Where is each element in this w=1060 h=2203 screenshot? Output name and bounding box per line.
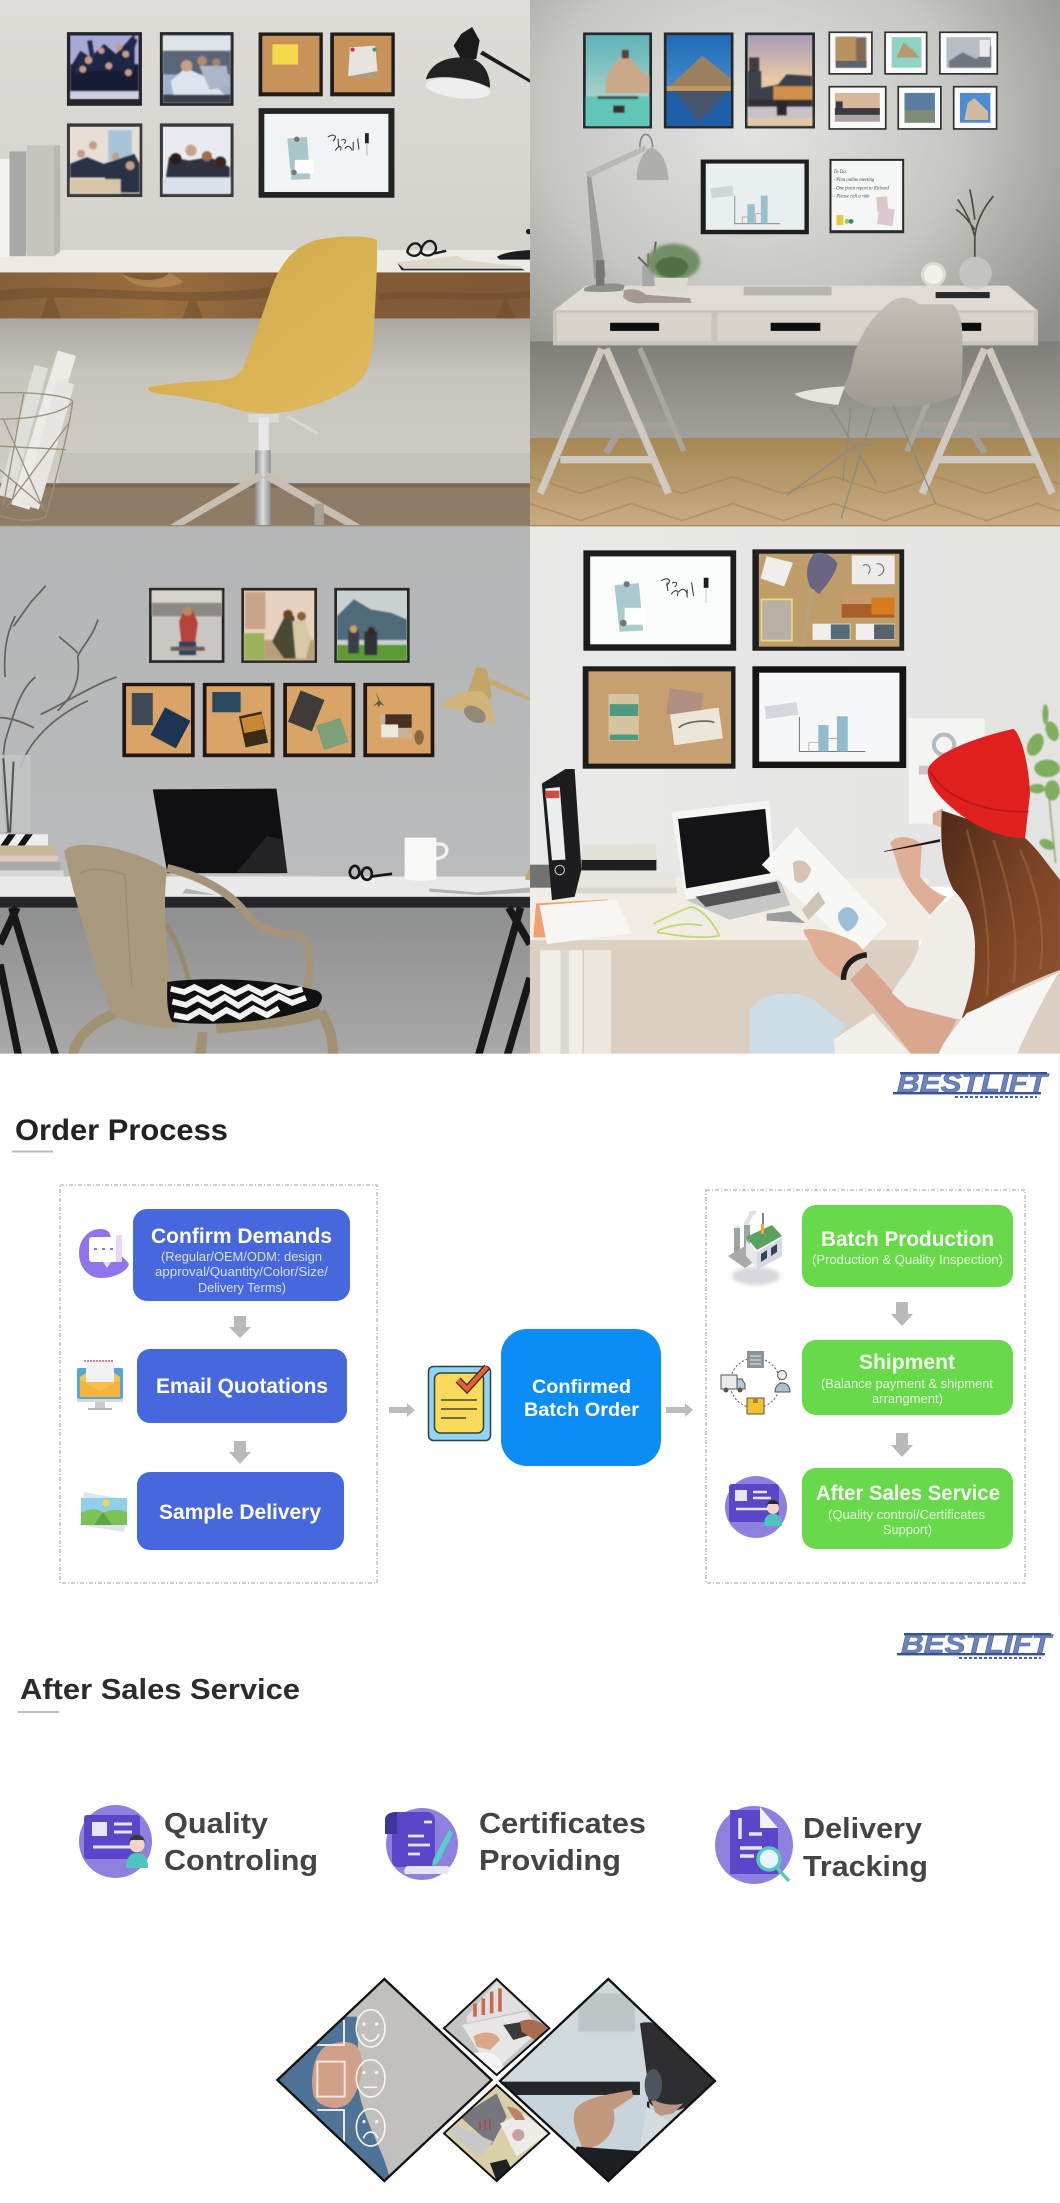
label	[479, 1808, 646, 1877]
cork boards	[259, 32, 395, 96]
marble desk top	[0, 877, 531, 1056]
desk lamp	[425, 27, 531, 260]
panel: pre-order steps	[60, 1185, 377, 1583]
print: notre dame dusk	[745, 32, 815, 128]
print: venice	[583, 32, 652, 128]
icon: photo	[80, 1492, 128, 1532]
panel: scene 1, yellow chair desk	[0, 0, 531, 527]
icon: document and magnifier	[715, 1806, 793, 1884]
label	[803, 1813, 928, 1883]
box: Confirmed Batch Order	[501, 1329, 661, 1466]
label	[164, 1808, 318, 1877]
step: Email Quotations	[137, 1349, 347, 1423]
gold desk lamp	[440, 667, 530, 880]
panel: scene 2, white desk with city prints	[530, 0, 1060, 529]
clock, vase, tablet	[921, 189, 993, 298]
lower arm	[850, 963, 957, 1055]
arrow: down 3	[891, 1302, 913, 1326]
mug	[405, 838, 447, 881]
laptop	[153, 789, 319, 881]
diamond photo collage	[273, 1977, 720, 2185]
step: Confirm Demands: approval/Quantity/Color/Size/	[155, 1264, 328, 1279]
white shirt	[892, 893, 975, 1020]
to do whiteboard: - Plan online meeting	[834, 178, 875, 183]
step: After Sales Service	[802, 1468, 1013, 1549]
box: Confirmed Batch Order: Batch Order	[524, 1400, 640, 1421]
icon: factory	[728, 1210, 782, 1285]
books pile	[530, 844, 677, 893]
plant	[1024, 704, 1060, 863]
icon: scroll and pen	[385, 1808, 458, 1880]
step: Batch Production: Batch Production	[821, 1228, 994, 1251]
photo frames row	[67, 32, 234, 197]
step: After Sales Service: (Quality control/Certificates	[828, 1507, 985, 1522]
right edge stripe	[1058, 1056, 1060, 1616]
label: Controling	[164, 1845, 318, 1877]
step: Confirm Demands	[133, 1209, 350, 1301]
print: louvre pyramid	[664, 32, 733, 128]
travel photo frames	[149, 588, 410, 663]
desk	[540, 286, 1052, 493]
whiteboard with chart	[752, 666, 906, 768]
long hair	[941, 811, 1060, 1018]
service: Quality Controling	[79, 1805, 318, 1878]
book stack	[0, 834, 64, 881]
desk	[0, 250, 530, 318]
logo: Bestlift lower: BESTLIFT	[901, 1629, 1054, 1659]
zigzag cushion	[167, 979, 322, 1024]
label: Quality	[164, 1808, 268, 1840]
step: Shipment: Shipment	[859, 1351, 955, 1374]
step: After Sales Service: Support)	[883, 1522, 932, 1537]
arrow: to production	[666, 1403, 693, 1417]
step: Sample Delivery	[137, 1472, 344, 1550]
box: Confirmed Batch Order: Confirmed	[532, 1377, 631, 1398]
to do whiteboard: - One point report to Richard	[834, 186, 890, 191]
matted small prints	[828, 31, 998, 130]
icon: shipment cycle	[721, 1351, 790, 1414]
papers on desk	[533, 900, 632, 944]
woman	[750, 729, 1060, 1055]
desk	[530, 878, 929, 1058]
glasses	[350, 866, 392, 880]
raised arm and pen	[890, 837, 947, 915]
icon: after sales agent	[725, 1476, 787, 1538]
wall chart poster	[909, 718, 985, 824]
books left	[0, 145, 60, 257]
plant and pens	[638, 242, 700, 292]
arrow: down 2	[229, 1441, 251, 1464]
white chair	[938, 972, 1058, 1055]
icon: confirmed document	[428, 1366, 490, 1440]
hand holding document	[803, 929, 867, 980]
to do whiteboard: - Please call a ride	[834, 194, 869, 199]
step: Shipment: arrangment)	[872, 1391, 943, 1406]
wire basket with rolls	[0, 353, 73, 520]
step: Confirm Demands: Confirm Demands	[151, 1225, 332, 1248]
laptop	[671, 800, 790, 920]
diamond: laptop chart	[440, 1977, 553, 2077]
panel: scene 4, woman reading at desk	[530, 525, 1060, 1058]
step: Shipment	[802, 1340, 1013, 1415]
step: Shipment: (Balance payment & shipment	[821, 1376, 993, 1391]
step: Confirm Demands: Delivery Terms)	[198, 1280, 286, 1295]
panel: scene 3, marble desk with cork squares	[0, 525, 531, 1056]
green earphones	[653, 907, 719, 937]
yellow chair	[148, 236, 377, 527]
whiteboard	[259, 108, 394, 198]
silver desk lamp	[584, 134, 669, 292]
arrow: down 1	[229, 1316, 251, 1338]
to do whiteboard: To Do:	[834, 169, 848, 175]
cork board with california card	[583, 666, 736, 769]
held document	[762, 827, 887, 954]
icon: chat	[79, 1229, 129, 1278]
diamond: feedback smileys	[273, 1977, 497, 2183]
step: Confirm Demands: (Regular/OEM/ODM: design	[161, 1249, 322, 1264]
step: Batch Production	[802, 1205, 1013, 1287]
label: Providing	[479, 1845, 621, 1877]
diamond: desk paperwork	[440, 2083, 553, 2183]
face	[933, 808, 943, 828]
whiteboard with note	[583, 550, 736, 651]
icon: quality agent	[79, 1805, 152, 1878]
red beanie	[928, 729, 1030, 838]
label: Delivery	[803, 1813, 922, 1845]
heading: After Sales Service: After Sales Service	[20, 1674, 300, 1706]
arrow: down 4	[891, 1433, 913, 1457]
step: Email Quotations: Email Quotations	[156, 1375, 328, 1398]
service: Delivery Tracking	[715, 1806, 928, 1884]
open book and glasses	[397, 241, 526, 270]
black binder	[542, 769, 581, 900]
panel: post-order steps	[706, 1190, 1025, 1583]
step: After Sales Service: After Sales Service	[816, 1482, 1000, 1505]
label: Certificates	[479, 1808, 646, 1840]
cork board with flowers	[752, 549, 904, 651]
step: Sample Delivery: Sample Delivery	[159, 1501, 321, 1524]
jeans	[750, 993, 847, 1055]
watch	[843, 955, 867, 980]
logo: Bestlift top: BESTLIFT	[897, 1068, 1050, 1098]
arrow: to confirmed order	[389, 1403, 415, 1417]
cork squares	[122, 683, 434, 757]
bare branches in vase	[0, 586, 117, 833]
heading: Order Process: Order Process	[15, 1114, 228, 1147]
icon: email	[77, 1361, 123, 1410]
tan metal chair	[64, 845, 333, 1056]
whiteboard chart	[701, 160, 809, 234]
white chair	[787, 298, 963, 519]
step: Batch Production: (Production & Quality Inspection)	[812, 1252, 1003, 1267]
service: Certificates Providing	[385, 1808, 646, 1880]
diamond: headset agent	[497, 1977, 720, 2185]
phone	[767, 911, 805, 923]
label: Tracking	[803, 1851, 928, 1883]
to do whiteboard	[829, 159, 904, 233]
